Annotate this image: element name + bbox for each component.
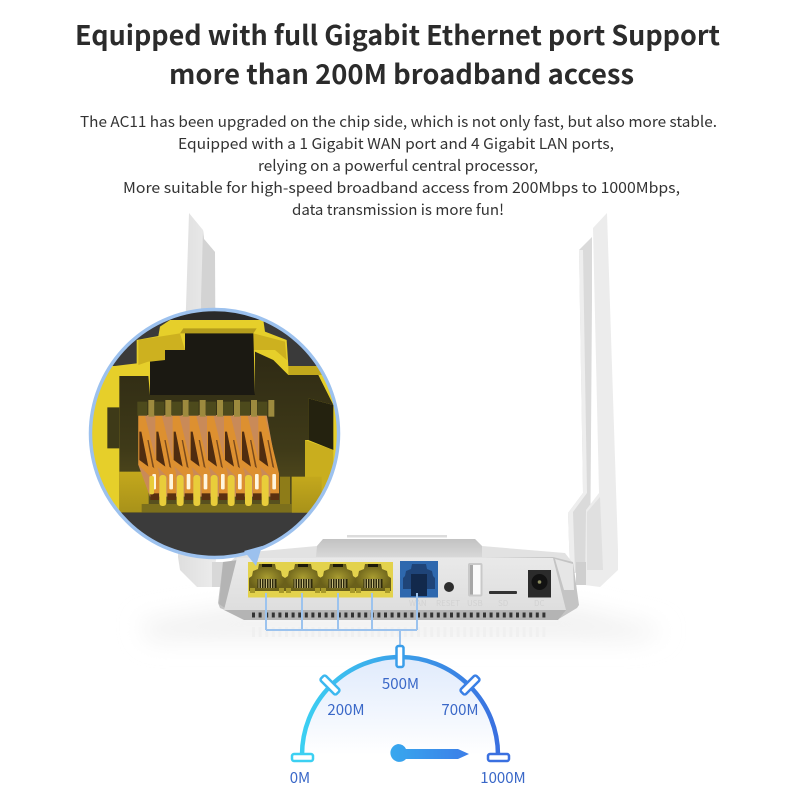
left antenna bbox=[178, 213, 224, 587]
port labels: SD bbox=[498, 598, 509, 609]
description text: More suitable for high-speed broadband access from 200Mbps to 1000Mbps, bbox=[123, 177, 680, 198]
socket opening bbox=[150, 333, 255, 395]
gauge labels: 0M bbox=[290, 767, 310, 788]
copper base bbox=[138, 415, 277, 497]
title bbox=[75, 14, 720, 92]
right lower yellow bbox=[305, 440, 334, 492]
description text: The AC11 has been upgraded on the chip side, which is not only fast, but also more stable. bbox=[80, 111, 717, 132]
gauge labels: 200M bbox=[327, 699, 365, 720]
gauge labels: 700M bbox=[441, 699, 479, 720]
port labels: USB bbox=[467, 598, 483, 609]
reset button bbox=[444, 582, 454, 592]
DC jack bbox=[528, 570, 551, 598]
bottom blocks bbox=[119, 472, 149, 512]
SD slot bbox=[489, 591, 517, 594]
gauge labels: 1000M bbox=[480, 767, 526, 788]
socket interior bbox=[119, 352, 333, 513]
router bbox=[218, 535, 579, 620]
description text: Equipped with a 1 Gigabit WAN port and 4 Gigabit LAN ports, bbox=[178, 133, 614, 154]
left notch bbox=[107, 407, 119, 448]
gauge needle bbox=[390, 744, 469, 762]
gauge ticks bbox=[292, 646, 509, 761]
floor shadow and reflection bbox=[140, 608, 665, 640]
top band bbox=[170, 312, 259, 320]
description text: data transmission is more fun! bbox=[292, 199, 504, 220]
contacts bbox=[137, 400, 159, 500]
title: more than 200M broadband access bbox=[169, 53, 634, 92]
port labels: RESET bbox=[436, 598, 460, 609]
right notch bbox=[308, 398, 333, 450]
yellow port frame bbox=[80, 320, 340, 513]
port labels: WAN bbox=[409, 598, 427, 609]
blue WAN port bbox=[400, 561, 438, 598]
right antenna bbox=[568, 213, 618, 587]
lower bezel bbox=[122, 512, 308, 514]
description text bbox=[80, 111, 717, 220]
port labels: DC bbox=[534, 598, 545, 609]
gauge dial bbox=[302, 657, 498, 755]
title: Equipped with full Gigabit Ethernet port Support bbox=[75, 14, 720, 53]
router body bbox=[218, 557, 579, 620]
connector lines bbox=[266, 593, 417, 648]
top bevels bbox=[180, 328, 257, 333]
magnifier: RJ45 port close-up bbox=[80, 307, 347, 566]
gauge labels: 500M bbox=[382, 673, 419, 694]
router lid bbox=[230, 535, 572, 562]
description text: relying on a powerful central processor, bbox=[258, 155, 538, 176]
yellow LAN ports bbox=[248, 562, 393, 598]
port labels bbox=[409, 598, 545, 609]
gauge labels bbox=[290, 673, 526, 788]
contact fingers bbox=[149, 475, 269, 506]
USB port bbox=[468, 563, 482, 596]
speed gauge bbox=[290, 646, 526, 788]
